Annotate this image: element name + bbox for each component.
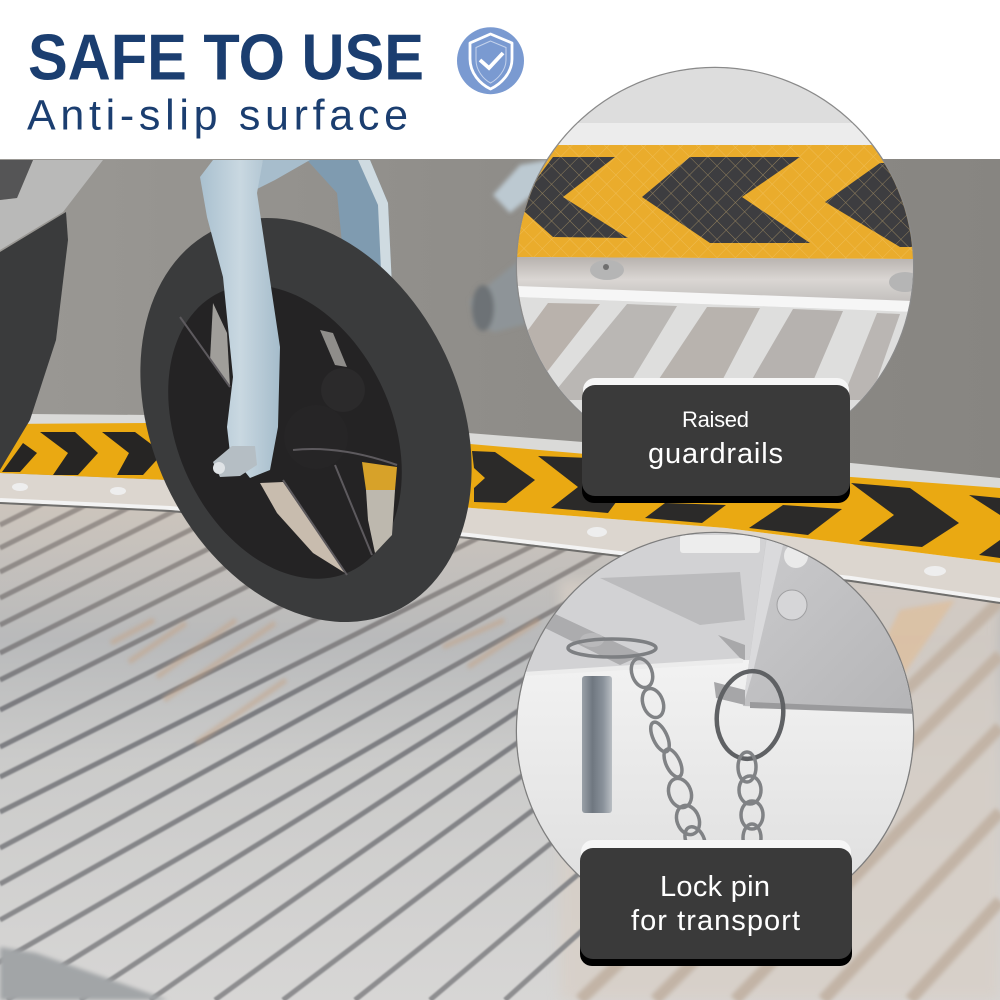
label box <box>582 385 850 496</box>
label text line two: guardrails <box>648 438 783 470</box>
callout: raised guardrails <box>582 378 850 503</box>
icon: shield with check mark <box>457 27 524 94</box>
label shadow <box>580 930 852 966</box>
panel: guardrail close-up circle <box>516 66 913 412</box>
label shadow <box>582 470 850 503</box>
rear fork arm <box>307 160 392 287</box>
right chain <box>738 752 763 852</box>
front caster wheel <box>77 164 535 676</box>
split ring on pin <box>568 639 656 657</box>
rail: yellow and black chevron strip <box>0 423 1000 563</box>
panel: lock pin close-up circle <box>516 532 914 878</box>
asphalt ground <box>0 159 1000 489</box>
rail: upper metal edge <box>0 414 1000 489</box>
rear wheel and fender <box>0 160 103 470</box>
label text line one: Lock pin <box>660 871 770 903</box>
rail: lower metal flange with rivets <box>0 473 1000 603</box>
metal flange with rivets <box>517 257 921 312</box>
ribbed ramp surface <box>517 297 913 420</box>
label text line two: for transport <box>631 905 800 937</box>
tyre <box>77 164 535 676</box>
left chain <box>630 656 706 840</box>
callout: lock pin for transport <box>580 840 852 966</box>
gaps between spokes <box>210 303 397 573</box>
title: SAFE TO USE <box>28 20 424 94</box>
label box <box>580 848 852 959</box>
top metal edge <box>558 123 872 146</box>
axle bolt <box>213 446 257 477</box>
white backdrop <box>517 660 913 876</box>
yellow chevron tape <box>517 145 915 259</box>
large key ring <box>714 668 786 762</box>
light backdrop <box>577 68 853 124</box>
rim <box>123 247 447 617</box>
label text line one: Raised <box>682 407 749 432</box>
header white band <box>0 0 1000 159</box>
ramp deck with diagonal stripes <box>0 502 1000 1000</box>
side bracket plate with holes <box>714 533 925 714</box>
label highlight <box>583 378 849 408</box>
ramp underside seen from the side <box>517 533 790 676</box>
hub and spokes <box>180 317 397 575</box>
subtitle: Anti-slip surface <box>27 92 408 140</box>
label highlight <box>581 840 851 870</box>
front fork <box>200 160 310 478</box>
lock pin <box>580 633 612 813</box>
blurred wheelchair parts at right <box>470 160 548 332</box>
